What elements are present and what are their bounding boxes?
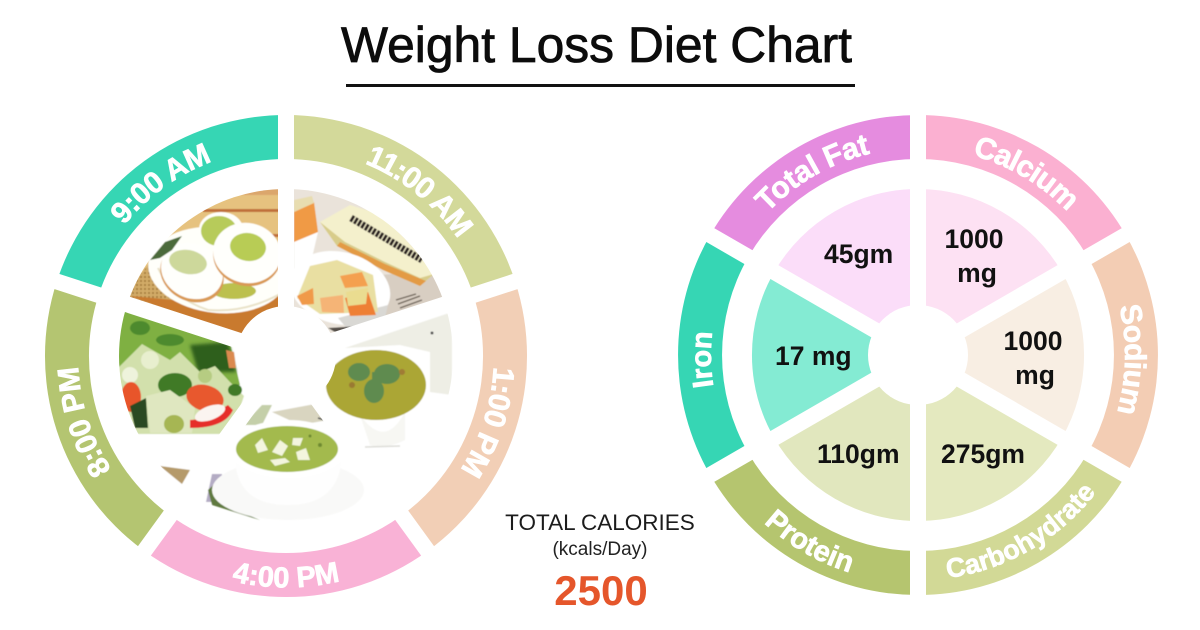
- food photo: boiled eggs: [130, 189, 278, 334]
- inner wedge: calcium value: [918, 189, 1062, 355]
- ring segment: Calcium: [926, 115, 1122, 250]
- value: calcium: mg: [957, 258, 997, 288]
- ring segment: 1:00 PM: [408, 289, 527, 546]
- inner wedge: carbohydrate value: [918, 355, 1062, 521]
- ring segment: Carbohydrate: [926, 460, 1122, 595]
- ring segment: Calcium: Calcium: [976, 138, 1076, 211]
- panel: meal timing wheel: [45, 115, 527, 597]
- value: total fat: 45gm: [824, 239, 893, 269]
- ring segment: 11:00 AM: [294, 115, 512, 288]
- ring segment: 1:00 PM: 1:00 PM: [461, 368, 514, 479]
- value: sodium: 1000: [1004, 326, 1062, 356]
- inner wedge: sodium value: [918, 272, 1084, 438]
- panel: nutrient wheel: [678, 115, 1158, 595]
- title: Weight Loss Diet Chart: [341, 17, 852, 73]
- ring segment: Protein: Protein: [764, 508, 852, 572]
- ring segment: 4:00 PM: 4:00 PM: [232, 562, 339, 588]
- ring segment: Total Fat: [714, 115, 910, 250]
- value: sodium: mg: [1015, 360, 1055, 390]
- total calories block: 2500: [554, 567, 648, 614]
- food photo: papaya: [294, 189, 442, 333]
- ring segment: Protein: [714, 460, 910, 595]
- total calories block: TOTAL CALORIES: [505, 510, 695, 535]
- ring segment: 8:00 PM: 8:00 PM: [57, 368, 110, 478]
- value: protein: 110gm: [817, 439, 900, 469]
- title underline: [346, 84, 855, 87]
- total calories block: [505, 510, 695, 614]
- ring segment: Sodium: Sodium: [1117, 304, 1148, 414]
- inner wedge: iron value: [752, 272, 918, 438]
- food photo: green soup: [206, 404, 339, 520]
- ring segment: 11:00 AM: 11:00 AM: [366, 147, 474, 238]
- ring segment: Carbohydrate: Carbohydrate: [946, 486, 1094, 578]
- value: iron: 17 mg: [775, 341, 852, 371]
- food photo hub: [236, 306, 336, 406]
- ring segment: Sodium: [1092, 242, 1158, 468]
- food photo: salad: [119, 312, 244, 484]
- ring segment: 9:00 AM: [59, 115, 278, 288]
- ring segment: 9:00 AM: 9:00 AM: [111, 142, 211, 222]
- ring segment: Total Fat: Total Fat: [752, 135, 870, 208]
- ring segment: 4:00 PM: [151, 520, 421, 597]
- inner wedge: total fat value: [774, 189, 918, 355]
- ring segment: 8:00 PM: [45, 289, 164, 546]
- value: calcium: 1000: [945, 224, 1003, 254]
- ring segment: Iron: [678, 242, 744, 468]
- value: carbohydrate: 275gm: [941, 439, 1025, 469]
- food photo: dal bowl: [326, 314, 452, 448]
- wheel hub: [868, 305, 968, 405]
- inner wedge: protein value: [774, 355, 918, 521]
- total calories block: (kcals/Day): [552, 539, 648, 560]
- ring segment: Iron: Iron: [692, 332, 714, 388]
